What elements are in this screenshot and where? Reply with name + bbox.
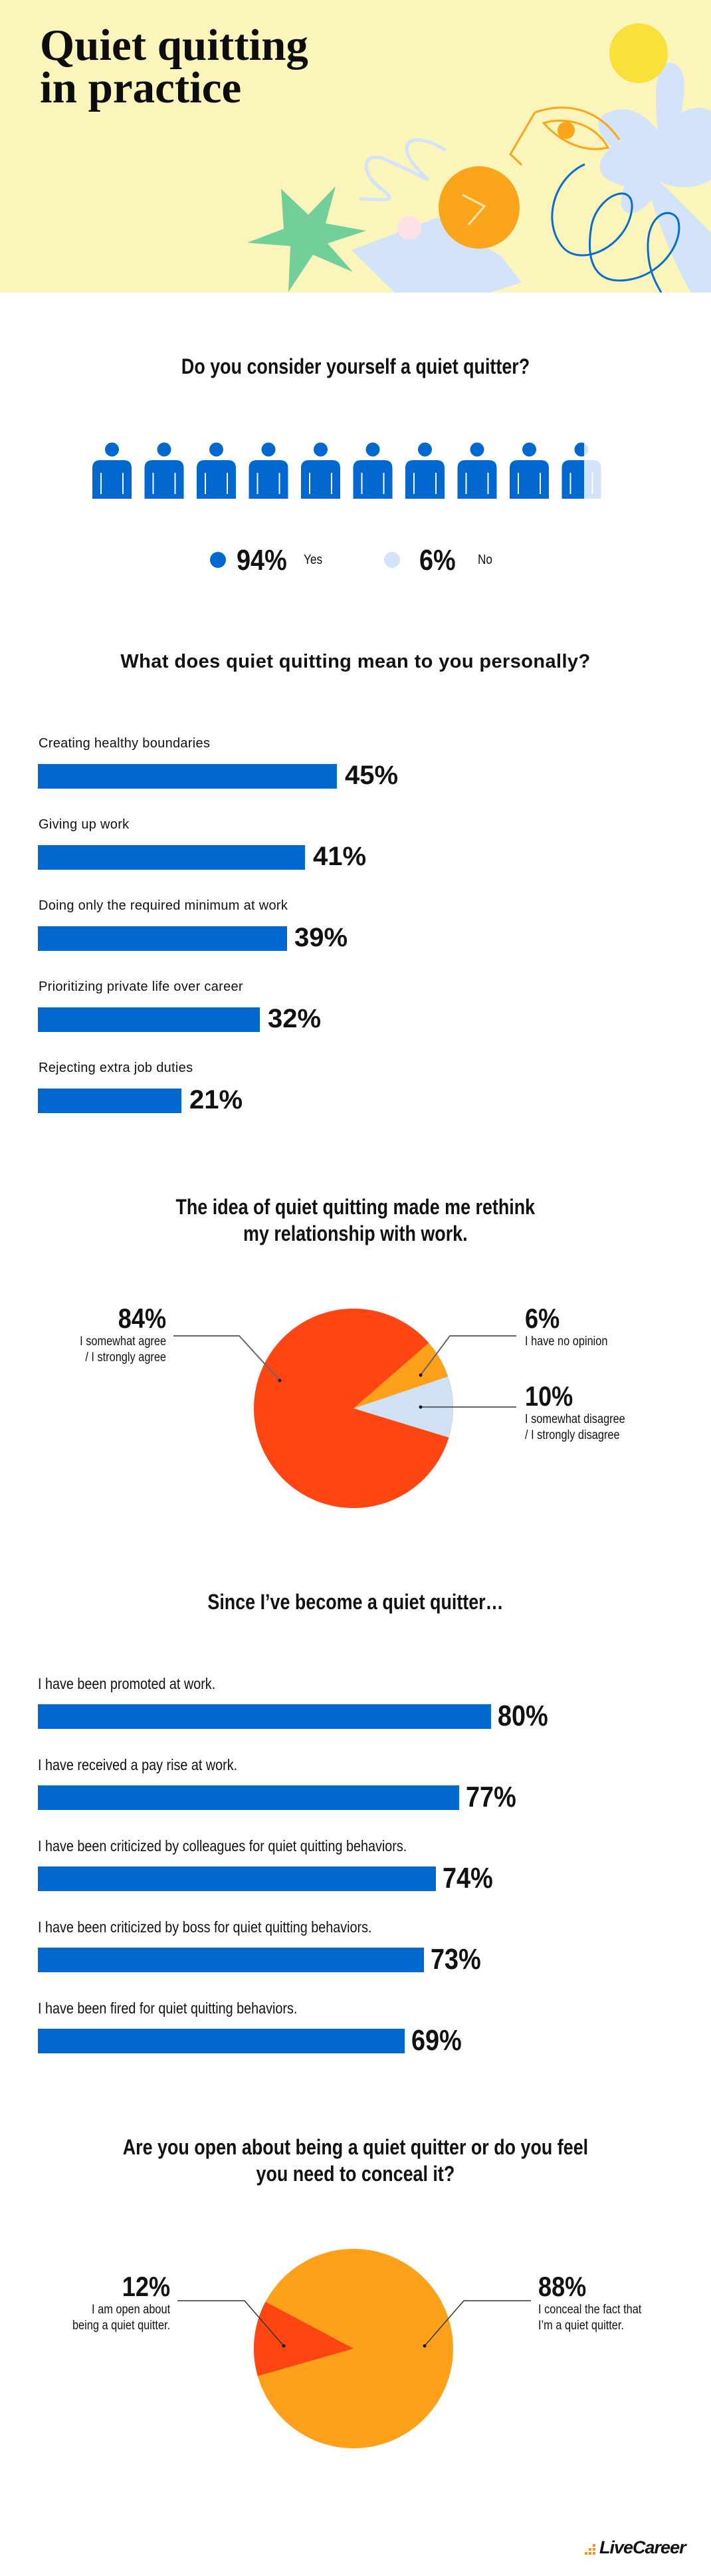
label: 88%: I’m a quiet quitter. [538, 2319, 624, 2333]
bar chart: outcomes: I have been criticized by colleagues for quiet quitting behaviors. [38, 1837, 407, 1855]
legend: yes/no: No [478, 553, 492, 567]
bar chart: outcomes: I have been promoted at work. [38, 1675, 215, 1692]
title: Quiet quitting [40, 21, 308, 70]
heading: open or conceal: Are you open about being a quiet quitter or do you feel [123, 2135, 588, 2159]
pie chart: rethink [173, 1309, 516, 1508]
label: 10% [525, 1380, 625, 1442]
bar chart: outcomes: 69% [411, 2024, 462, 2057]
legend: yes/no [210, 544, 492, 577]
bar chart: meanings: 45% [345, 761, 398, 790]
label: 84%: 84% [118, 1303, 166, 1334]
label: 84% [80, 1303, 166, 1364]
label: 12% [72, 2271, 170, 2333]
bar chart: outcomes: I have been fired for quiet quitting behaviors. [38, 1999, 297, 2017]
bar chart: meanings: 32% [268, 1004, 321, 1033]
label: 6%: 6% [525, 1303, 559, 1334]
label: 12%: I am open about [92, 2303, 170, 2317]
bar chart: meanings: 39% [294, 923, 348, 952]
label: 10%: / I strongly disagree [525, 1428, 620, 1442]
heading: rethink: my relationship with work. [243, 1222, 468, 1245]
bar chart: outcomes: 80% [498, 1700, 548, 1732]
label: 88% [538, 2271, 642, 2333]
heading: quiet quitter question: Do you consider yourself a quiet quitter? [181, 354, 530, 378]
label: 6% [525, 1303, 607, 1349]
pie chart: open vs conceal [177, 2249, 531, 2448]
bar chart: meanings: Rejecting extra job duties [39, 1061, 193, 1075]
heading: open or conceal [123, 2135, 588, 2186]
pictogram: people [92, 443, 601, 499]
bar chart: meanings: Prioritizing private life over career [39, 979, 243, 994]
label: 6%: I have no opinion [525, 1335, 607, 1349]
bar chart: meanings: Creating healthy boundaries [39, 736, 210, 751]
label: 88%: 88% [538, 2271, 586, 2302]
label: 88%: I conceal the fact that [538, 2303, 641, 2317]
bar chart: meanings [38, 736, 398, 1114]
logo: LiveCareer: LiveCareer [599, 2537, 686, 2557]
label: 10%: 10% [525, 1380, 573, 1412]
heading: since quiet quitter: Since I’ve become a quiet quitter… [207, 1590, 504, 1614]
label: 84%: / I strongly agree [85, 1351, 166, 1364]
bar chart: meanings: 21% [189, 1085, 243, 1114]
legend: yes/no: 6% [419, 544, 456, 577]
heading: open or conceal: you need to conceal it? [256, 2162, 455, 2186]
legend: yes/no: 94% [237, 544, 287, 577]
header banner [0, 0, 711, 293]
heading: rethink: The idea of quiet quitting made me rethink [176, 1195, 535, 1219]
title: in practice [40, 63, 241, 112]
heading: meaning: What does quiet quitting mean to you personally? [120, 651, 591, 672]
bar chart: outcomes: I have been criticized by boss for quiet quitting behaviors. [38, 1918, 371, 1936]
bar chart: outcomes: I have received a pay rise at work. [38, 1756, 237, 1773]
label: 84%: I somewhat agree [80, 1335, 166, 1349]
label: 12%: 12% [122, 2271, 170, 2302]
bar chart: outcomes: 73% [431, 1943, 481, 1976]
label: 10%: I somewhat disagree [525, 1412, 625, 1426]
bar chart: outcomes: 77% [466, 1781, 516, 1813]
legend: yes/no: Yes [304, 553, 322, 567]
bar chart: meanings: Doing only the required minimum at work [39, 898, 288, 913]
bar chart: outcomes: 74% [443, 1862, 493, 1894]
header illustration [247, 23, 711, 293]
label: 12%: being a quiet quitter. [72, 2319, 170, 2333]
bar chart: outcomes [38, 1675, 548, 2057]
bar chart: meanings: 41% [313, 842, 366, 871]
heading: rethink [175, 1195, 535, 1245]
bar chart: meanings: Giving up work [39, 817, 129, 832]
title [40, 21, 308, 112]
